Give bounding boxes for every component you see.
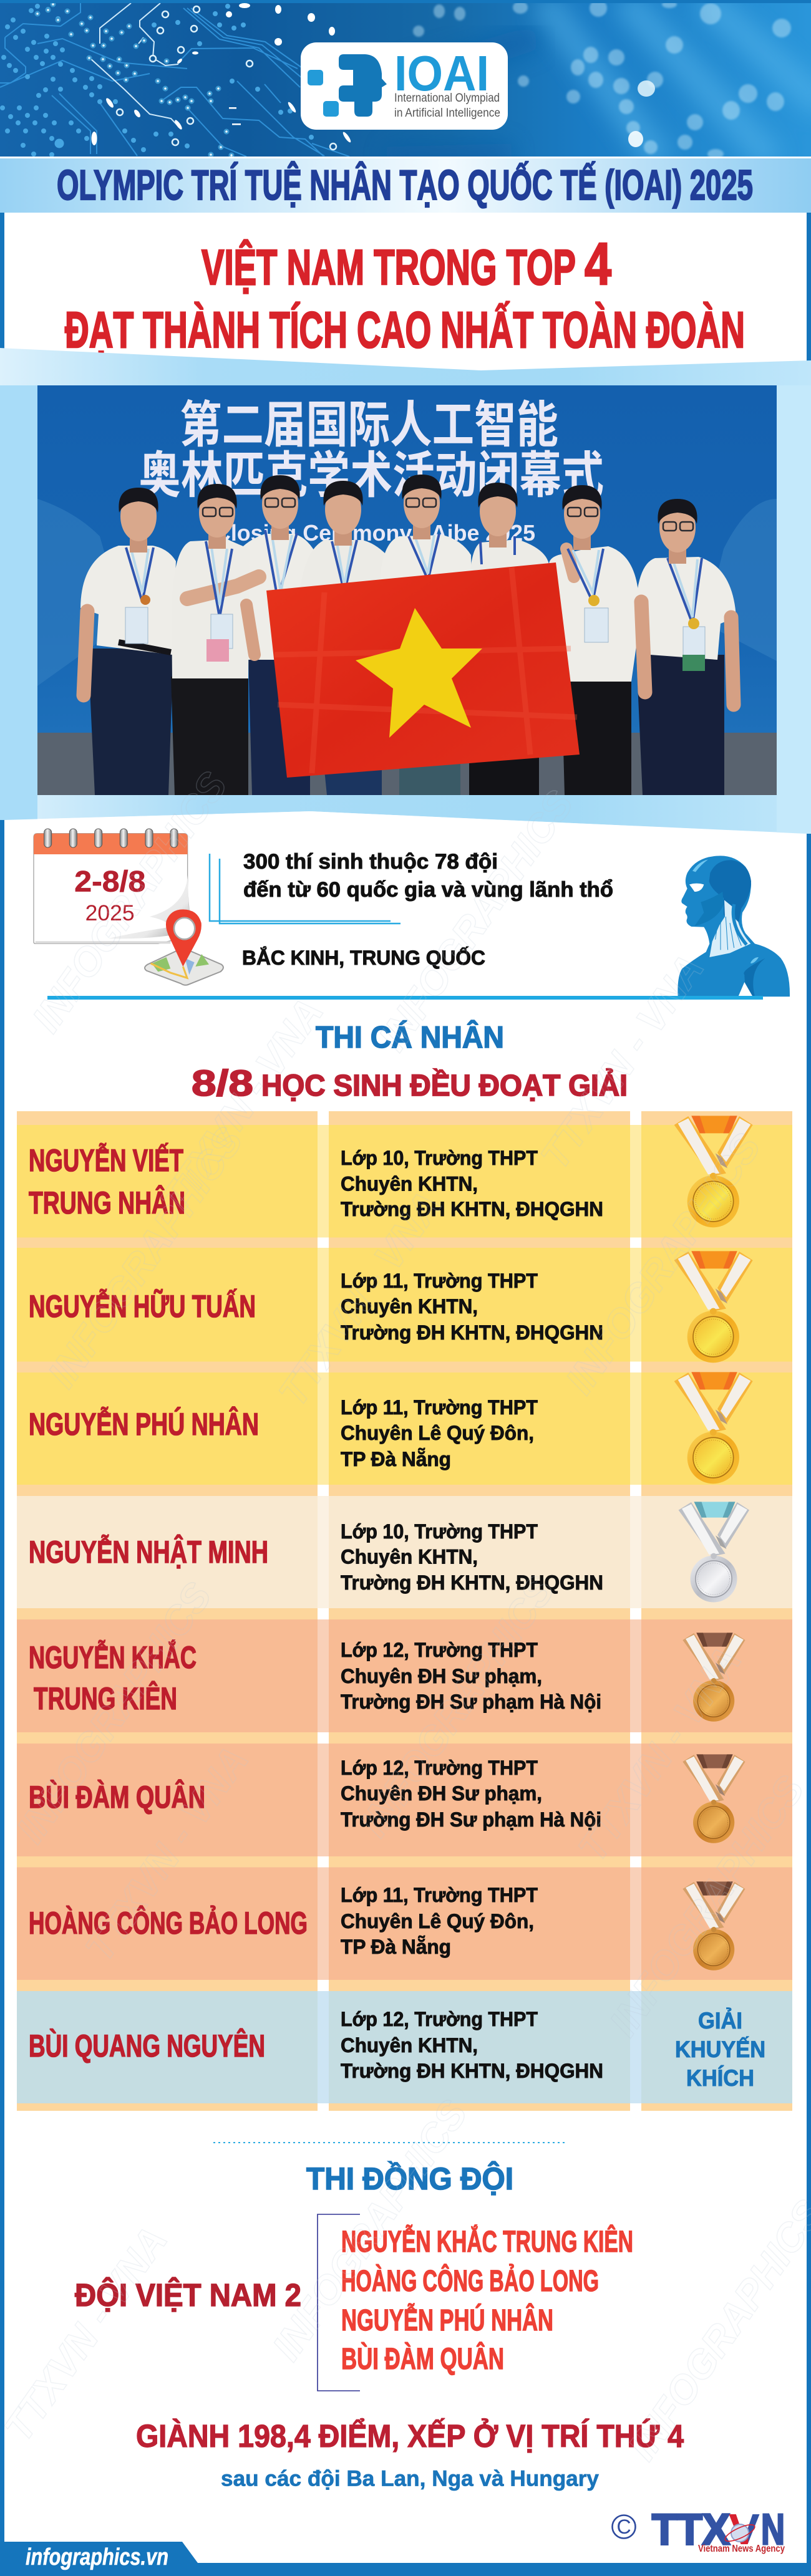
backdrop text: 第二届国际人工智能 bbox=[180, 385, 558, 457]
row: Nguyễn Viết Trung Nhân, gold: Trường ĐH KHTN, ĐHQGHN bbox=[341, 1198, 603, 1220]
row: Nguyễn Khắc Trung Kiên, bronze: Chuyên ĐH Sư phạm, bbox=[341, 1665, 542, 1687]
watermarks: INFOGRAPHICS bbox=[39, 1119, 251, 1396]
backdrop text: 奥林匹克学术活动闭幕式 bbox=[138, 435, 604, 508]
team members: BÙI ĐÀM QUÂN bbox=[341, 2342, 504, 2376]
row: Nguyễn Phú Nhân, gold: Lớp 11, Trường THPT bbox=[341, 1396, 538, 1419]
watermarks: INFOGRAPHICS bbox=[263, 2092, 476, 2368]
icon: gold medal 3 bbox=[674, 1372, 753, 1483]
row: Nguyễn Nhật Minh, silver bbox=[17, 1496, 792, 1608]
section heading: team: THI ĐỒNG ĐỘI bbox=[306, 2161, 513, 2196]
label: consolation prize bbox=[675, 2008, 765, 2091]
row: Nguyễn Nhật Minh, silver: Lớp 10, Trường THPT bbox=[341, 1520, 538, 1543]
row: Nguyễn Phú Nhân, gold bbox=[17, 1372, 792, 1485]
divider line bbox=[47, 996, 763, 1000]
watermarks: TTXVN - VNA bbox=[270, 1184, 450, 1414]
row: Hoàng Công Bảo Long, bronze: HOÀNG CÔNG BẢO LONG bbox=[29, 1905, 308, 1941]
row: Nguyễn Khắc Trung Kiên, bronze bbox=[17, 1619, 792, 1732]
text: location: BẮC KINH, TRUNG QUỐC bbox=[242, 947, 485, 969]
header: circuit board banner bbox=[0, 0, 811, 162]
row: Bùi Đàm Quân, bronze bbox=[17, 1744, 792, 1856]
copyright mark bbox=[613, 2516, 635, 2538]
row: Bùi Đàm Quân, bronze: Trường ĐH Sư phạm Hà Nội bbox=[341, 1808, 601, 1831]
main title bbox=[65, 231, 745, 359]
text: participants: đến từ 60 quốc gia và vùng lãnh thổ bbox=[243, 878, 613, 902]
icon: map pin bbox=[145, 909, 223, 985]
result headline: GIÀNH 198,4 ĐIỂM, XẾP Ở VỊ TRÍ THỨ 4 bbox=[136, 2418, 684, 2454]
row: Nguyễn Hữu Tuấn, gold: Trường ĐH KHTN, ĐHQGHN bbox=[341, 1321, 603, 1344]
watermarks: INFOGRAPHICS bbox=[600, 1768, 811, 2044]
row: Nguyễn Phú Nhân, gold: Chuyên Lê Quý Đôn, bbox=[341, 1422, 534, 1444]
icon: bronze medal 3 bbox=[682, 1881, 745, 1971]
section heading: individual: THI CÁ NHÂN bbox=[316, 1020, 504, 1054]
row: Nguyễn Phú Nhân, gold: NGUYỄN PHÚ NHÂN bbox=[29, 1407, 259, 1442]
row: Nguyễn Hữu Tuấn, gold: Lớp 11, Trường THPT bbox=[341, 1270, 538, 1292]
section subheading: 8/8 students won prizes: 8/8 bbox=[192, 1063, 253, 1104]
watermarks: TTXVN - VNA bbox=[569, 1639, 750, 1869]
icon: silver medal bbox=[679, 1502, 749, 1603]
label: consolation prize: KHÍCH bbox=[686, 2065, 754, 2091]
team members bbox=[341, 2224, 633, 2376]
logo: IOAI bbox=[301, 42, 508, 130]
watermarks: INFOGRAPHICS bbox=[23, 764, 236, 1040]
watermarks: INFOGRAPHICS bbox=[556, 1126, 769, 1402]
result note: sau các đội Ba Lan, Nga và Hungary bbox=[221, 2467, 600, 2491]
dotted divider bbox=[213, 2142, 566, 2143]
copyright mark: C bbox=[616, 2516, 631, 2538]
row: Nguyễn Viết Trung Nhân, gold: TRUNG NHÂN bbox=[29, 1185, 185, 1220]
row: Nguyễn Hữu Tuấn, gold bbox=[17, 1248, 792, 1362]
logo: IOAI: International Olympiad bbox=[394, 92, 500, 105]
logo: TTXVN bbox=[652, 2505, 785, 2554]
section subheading: 8/8 students won prizes: HỌC SINH ĐỀU ĐOẠT GIẢI bbox=[261, 1068, 628, 1102]
row: Nguyễn Hữu Tuấn, gold: NGUYỄN HỮU TUẤN bbox=[29, 1288, 256, 1324]
main title: 4 bbox=[585, 231, 611, 297]
row: Nguyễn Khắc Trung Kiên, bronze: TRUNG KIÊN bbox=[34, 1681, 177, 1716]
icon: calendar with dates: 2025 bbox=[85, 901, 135, 925]
team name: ĐỘI VIỆT NAM 2 bbox=[75, 2277, 301, 2313]
light blue wave panel bbox=[0, 348, 811, 834]
watermarks: TTXVN - VNA bbox=[0, 2219, 176, 2449]
decorative corner lines bbox=[210, 854, 401, 924]
row: Nguyễn Viết Trung Nhân, gold: NGUYỄN VIẾT bbox=[29, 1143, 183, 1178]
icon: calendar with dates bbox=[34, 829, 190, 943]
team members: NGUYỄN KHẮC TRUNG KIÊN bbox=[341, 2224, 633, 2259]
table: individual results bbox=[17, 1111, 792, 2111]
watermarks bbox=[0, 764, 811, 2468]
row: Nguyễn Khắc Trung Kiên, bronze: Lớp 12, Trường THPT bbox=[341, 1639, 538, 1661]
team members: HOÀNG CÔNG BẢO LONG bbox=[341, 2264, 599, 2298]
text: participants: 300 thí sinh thuộc 78 đội bbox=[243, 850, 498, 874]
row: Nguyễn Khắc Trung Kiên, bronze: Trường ĐH Sư phạm Hà Nội bbox=[341, 1691, 601, 1713]
logo: TTXVN: N bbox=[761, 2505, 785, 2554]
label: consolation prize: KHUYẾN bbox=[675, 2037, 765, 2062]
row: Nguyễn Hữu Tuấn, gold: Chuyên KHTN, bbox=[341, 1295, 478, 1318]
logo: TTXVN: V bbox=[729, 2505, 760, 2554]
row: Bùi Đàm Quân, bronze: Chuyên ĐH Sư phạm, bbox=[341, 1782, 542, 1805]
bracket bbox=[318, 2214, 360, 2391]
white info panel bbox=[0, 811, 807, 998]
row: Nguyễn Nhật Minh, silver: Chuyên KHTN, bbox=[341, 1545, 478, 1568]
icon: gold medal 1 bbox=[674, 1116, 753, 1227]
row: Bùi Quang Nguyên, consolation prize: BÙI QUANG NGUYÊN bbox=[29, 2028, 265, 2063]
row: Bùi Đàm Quân, bronze: BÙI ĐÀM QUÂN bbox=[29, 1780, 205, 1815]
label: consolation prize: GIẢI bbox=[698, 2008, 742, 2033]
backdrop text bbox=[140, 399, 603, 541]
section subheading: 8/8 students won prizes bbox=[192, 1063, 628, 1104]
watermarks: INFOGRAPHICS bbox=[369, 783, 582, 1059]
logo: TTXVN: Vietnam News Agency bbox=[698, 2544, 785, 2554]
footer bar and website tab bbox=[0, 2542, 811, 2576]
logo: TTXVN: TTX bbox=[652, 2505, 730, 2554]
row: Nguyễn Nhật Minh, silver: Trường ĐH KHTN, ĐHQGHN bbox=[341, 1571, 603, 1594]
row: Nguyễn Viết Trung Nhân, gold: Chuyên KHTN, bbox=[341, 1172, 478, 1195]
logo: IOAI: IOAI bbox=[394, 46, 489, 101]
row: Bùi Quang Nguyên, consolation prize: Trường ĐH KHTN, ĐHQGHN bbox=[341, 2060, 603, 2082]
watermarks: INFOGRAPHICS bbox=[7, 1575, 220, 1851]
main title: VIỆT NAM TRONG TOP bbox=[202, 239, 576, 295]
row: Nguyễn Nhật Minh, silver: NGUYỄN NHẬT MINH bbox=[29, 1535, 268, 1570]
watermarks: INFOGRAPHICS bbox=[351, 1568, 563, 1845]
row: Bùi Đàm Quân, bronze: Lớp 12, Trường THPT bbox=[341, 1757, 538, 1779]
row: Nguyễn Khắc Trung Kiên, bronze: NGUYỄN KHẮC bbox=[29, 1640, 197, 1675]
icon: calendar with dates: 2-8/8 bbox=[74, 865, 145, 898]
row: Bùi Quang Nguyên, consolation prize bbox=[17, 1991, 792, 2103]
row: Nguyễn Phú Nhân, gold: TP Đà Nẵng bbox=[341, 1448, 451, 1470]
row: Bùi Quang Nguyên, consolation prize: Chuyên KHTN, bbox=[341, 2034, 478, 2057]
row: Hoàng Công Bảo Long, bronze: Lớp 11, Trường THPT bbox=[341, 1884, 538, 1906]
icon: bronze medal 2 bbox=[682, 1754, 745, 1843]
team photo with Vietnamese flag bbox=[37, 385, 777, 795]
logo: IOAI: in Artificial Intelligence bbox=[394, 107, 500, 120]
Vietnamese flag bbox=[266, 562, 580, 778]
backdrop text: Closing Ceremony · Aibe 2025 bbox=[215, 520, 535, 546]
text: participants bbox=[243, 850, 613, 902]
team members: NGUYỄN PHÚ NHÂN bbox=[341, 2303, 553, 2337]
icon: gold medal 2 bbox=[674, 1251, 753, 1363]
row: Hoàng Công Bảo Long, bronze: Chuyên Lê Quý Đôn, bbox=[341, 1910, 534, 1932]
row: Hoàng Công Bảo Long, bronze bbox=[17, 1867, 792, 1980]
footer bar and website tab: infographics.vn bbox=[26, 2544, 168, 2570]
row: Hoàng Công Bảo Long, bronze: TP Đà Nẵng bbox=[341, 1936, 451, 1958]
icon: AI human bust bbox=[677, 856, 790, 996]
icon: AI head bbox=[308, 54, 387, 117]
row: Nguyễn Viết Trung Nhân, gold: Lớp 10, Trường THPT bbox=[341, 1147, 538, 1169]
watermarks: TTXVN - VNA bbox=[532, 947, 712, 1177]
watermarks: TTXVN - VNA bbox=[151, 990, 332, 1221]
watermarks: TTXVN - VNA bbox=[76, 1739, 257, 1969]
icon: bronze medal 1 bbox=[682, 1633, 745, 1722]
students bbox=[80, 475, 736, 795]
row: Bùi Quang Nguyên, consolation prize: Lớp 12, Trường THPT bbox=[341, 2008, 538, 2030]
row: Nguyễn Viết Trung Nhân, gold bbox=[17, 1125, 792, 1237]
